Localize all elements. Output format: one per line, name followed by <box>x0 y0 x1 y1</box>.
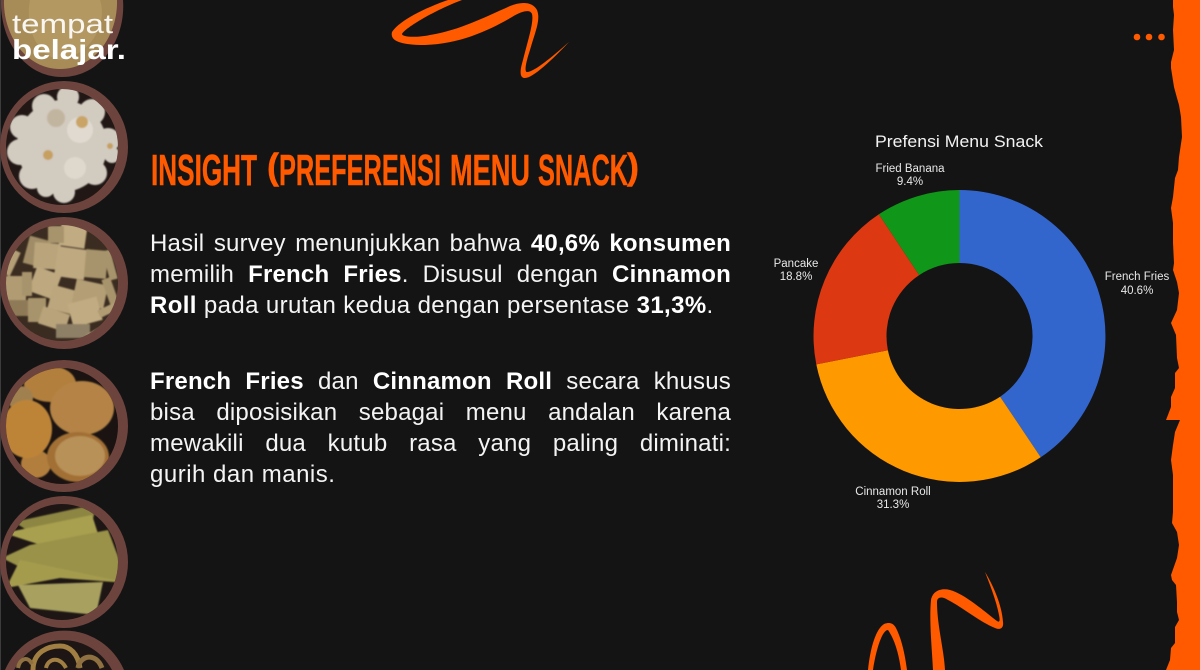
text block: paragraph 2 <box>150 368 731 488</box>
icon: bowl of popcorn <box>0 81 128 213</box>
text block: paragraph 1 <box>150 230 731 319</box>
label: Cinnamon Roll <box>855 486 931 511</box>
text block: paragraph 1: Roll pada urutan kedua dengan persentase 31,3%. <box>150 292 714 319</box>
heading: PREFERENSI <box>279 146 441 195</box>
panel: snack bowls <box>0 0 128 670</box>
icon: top brush stroke <box>392 0 569 78</box>
logo <box>12 9 126 65</box>
label: Fried Banana <box>875 163 945 188</box>
slice: French Fries 40.6% <box>960 190 1105 457</box>
left page edge <box>0 0 1 670</box>
heading: SNACK <box>538 146 628 195</box>
label: French Fries <box>1105 271 1170 297</box>
label: Cinnamon Roll: 31.3% <box>877 499 909 511</box>
text block: paragraph 2: French Fries dan Cinnamon Roll secara khusus <box>150 368 731 395</box>
heading: ( <box>267 146 279 187</box>
logo: tempat <box>12 9 114 39</box>
slice: Fried Banana 9.4% <box>879 190 960 275</box>
icon: bottom brush stroke right <box>930 572 1003 670</box>
heading <box>151 146 639 195</box>
label: Cinnamon Roll: Cinnamon Roll <box>855 486 931 498</box>
donut chart <box>774 132 1170 511</box>
heading: ) <box>627 146 639 187</box>
label: French Fries: 40.6% <box>1121 285 1153 297</box>
label: Pancake <box>774 258 818 283</box>
icon: menu dots <box>1134 34 1165 40</box>
heading: INSIGHT <box>151 146 257 195</box>
text block: paragraph 2: gurih dan manis. <box>150 461 335 488</box>
label: Pancake: Pancake <box>774 258 818 270</box>
text block: paragraph 1: memilih French Fries. Disusul dengan Cinnamon <box>150 261 731 288</box>
icon: bowl of chips <box>1 0 123 77</box>
icon: bowl of nachos <box>0 496 128 628</box>
label: Fried Banana: 9.4% <box>897 176 923 188</box>
icon: bottom brush stroke left <box>868 623 907 670</box>
label: Pancake: 18.8% <box>780 271 812 283</box>
logo: belajar. <box>12 34 126 65</box>
label: Fried Banana: Fried Banana <box>875 163 945 175</box>
slice: Cinnamon Roll 31.3% <box>816 350 1041 482</box>
icon: torn orange edge <box>1166 0 1200 670</box>
chart title: Prefensi Menu Snack <box>875 132 1044 151</box>
label: French Fries: French Fries <box>1105 271 1170 283</box>
icon: bowl of pretzels <box>5 631 124 670</box>
slice: Pancake 18.8% <box>814 214 919 364</box>
icon: bowl of crackers <box>0 217 128 349</box>
heading: MENU <box>450 146 530 195</box>
text block: paragraph 1: Hasil survey menunjukkan bahwa 40,6% konsumen <box>150 230 731 257</box>
icon: bowl of cookies <box>0 360 128 492</box>
text block: paragraph 2: bisa diposisikan sebagai menu andalan karena <box>150 399 731 426</box>
text block: paragraph 2: mewakili dua kutub rasa yang paling diminati: <box>150 430 731 457</box>
